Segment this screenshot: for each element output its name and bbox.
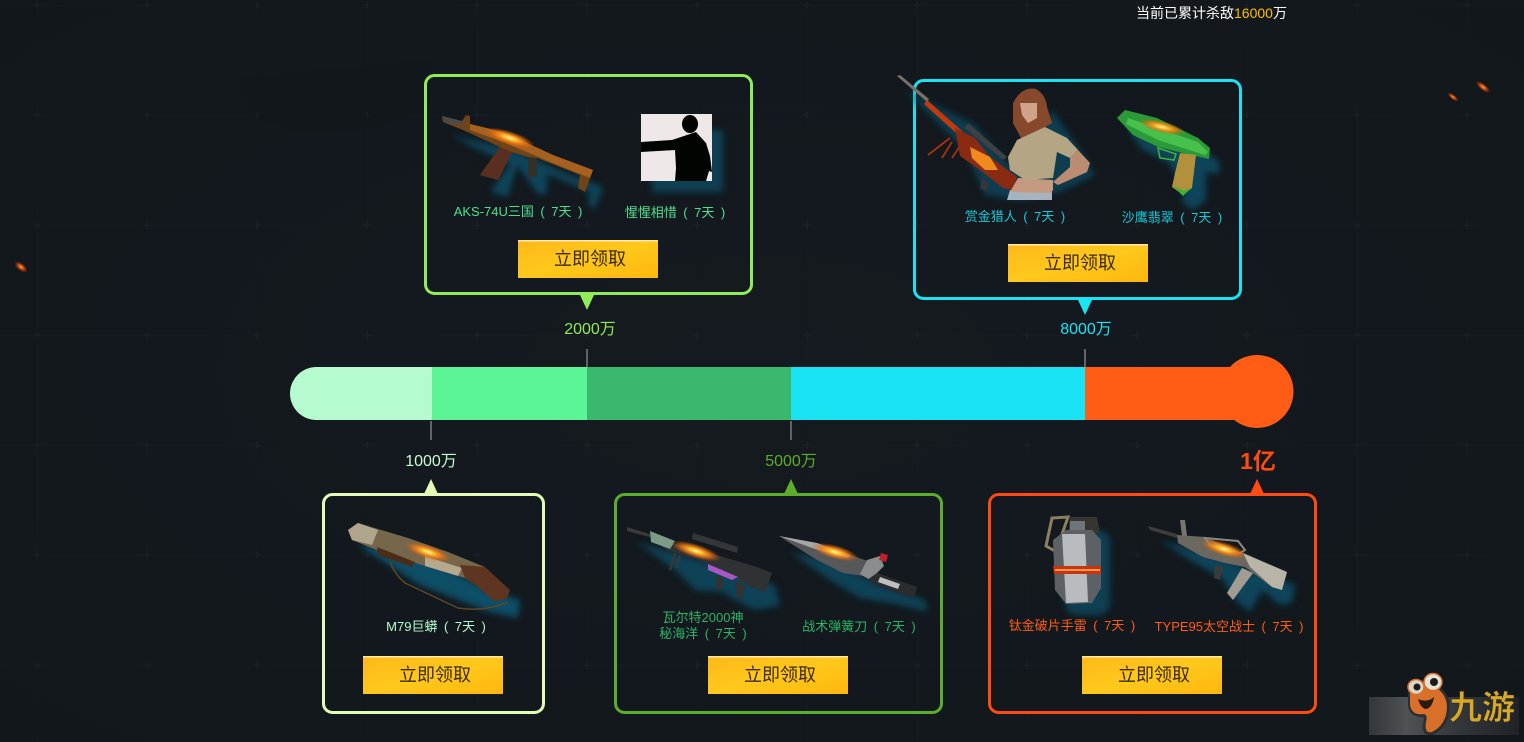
label: frag grenade: 钛金破片手雷 ( 7天 )	[1009, 618, 1135, 633]
milestone label: 5000万: 5000万	[765, 453, 817, 470]
button: 立即领取	[399, 665, 471, 685]
icon: tactical spring knife	[779, 536, 928, 612]
icon: AKS-74U rifle	[442, 115, 603, 209]
sparks	[12, 79, 1492, 275]
icon: M79 grenade launcher	[348, 523, 520, 618]
panel: 2000万 reward	[426, 76, 752, 310]
label: bounty hunter: 赏金猎人 ( 7天 )	[965, 209, 1065, 224]
button	[1008, 244, 1148, 282]
watermark: 九游 logo	[1369, 674, 1519, 735]
icon: green desert eagle	[1117, 110, 1220, 210]
label: WA2000 second line: 秘海洋 ( 7天 )	[659, 626, 747, 641]
label: M79: M79巨蟒 ( 7天 )	[386, 619, 486, 634]
milestone label: 1000万: 1000万	[405, 453, 457, 470]
label: spring knife: 战术弹簧刀 ( 7天 )	[802, 619, 916, 634]
label: silhouette: 惺惺相惜 ( 7天 )	[625, 205, 725, 220]
label: WA2000: 瓦尔特2000神	[663, 610, 743, 625]
milestone label: 8000万: 8000万	[1060, 321, 1112, 338]
milestone label: 2000万: 2000万	[564, 321, 616, 338]
milestone ticks	[431, 349, 1085, 440]
icon: TYPE95 rifle	[1148, 520, 1295, 612]
button: 立即领取	[554, 249, 626, 269]
icon: female hunter with rifle	[897, 75, 1095, 200]
button: 立即领取	[1118, 665, 1190, 685]
icon: WA2000 sniper rifle	[627, 527, 780, 610]
button	[363, 656, 503, 694]
label: desert eagle: 沙鹰翡翠 ( 7天 )	[1122, 210, 1222, 225]
label: TYPE95: TYPE95太空战士 ( 7天 )	[1155, 619, 1303, 634]
icon: silhouette portrait	[641, 114, 723, 192]
button	[1082, 656, 1222, 694]
panel: 5000万 reward	[616, 479, 942, 712]
watermark: 九游 logo: 九游	[1449, 689, 1515, 726]
button: 立即领取	[1044, 253, 1116, 273]
icon: titanium frag grenade	[1046, 517, 1110, 615]
label: AKS-74U: AKS-74U三国 ( 7天 )	[454, 204, 582, 219]
panel: 1000万 reward	[324, 479, 544, 712]
total kills counter: 当前已累计杀敌16000万	[1136, 5, 1287, 21]
progress bar	[290, 355, 1294, 428]
panel: 8000万 reward	[897, 75, 1240, 315]
panel: 1亿 reward	[990, 479, 1316, 712]
button	[708, 656, 848, 694]
milestone label: 1亿: 1亿	[1240, 448, 1276, 474]
button	[518, 240, 658, 278]
button: 立即领取	[744, 665, 816, 685]
